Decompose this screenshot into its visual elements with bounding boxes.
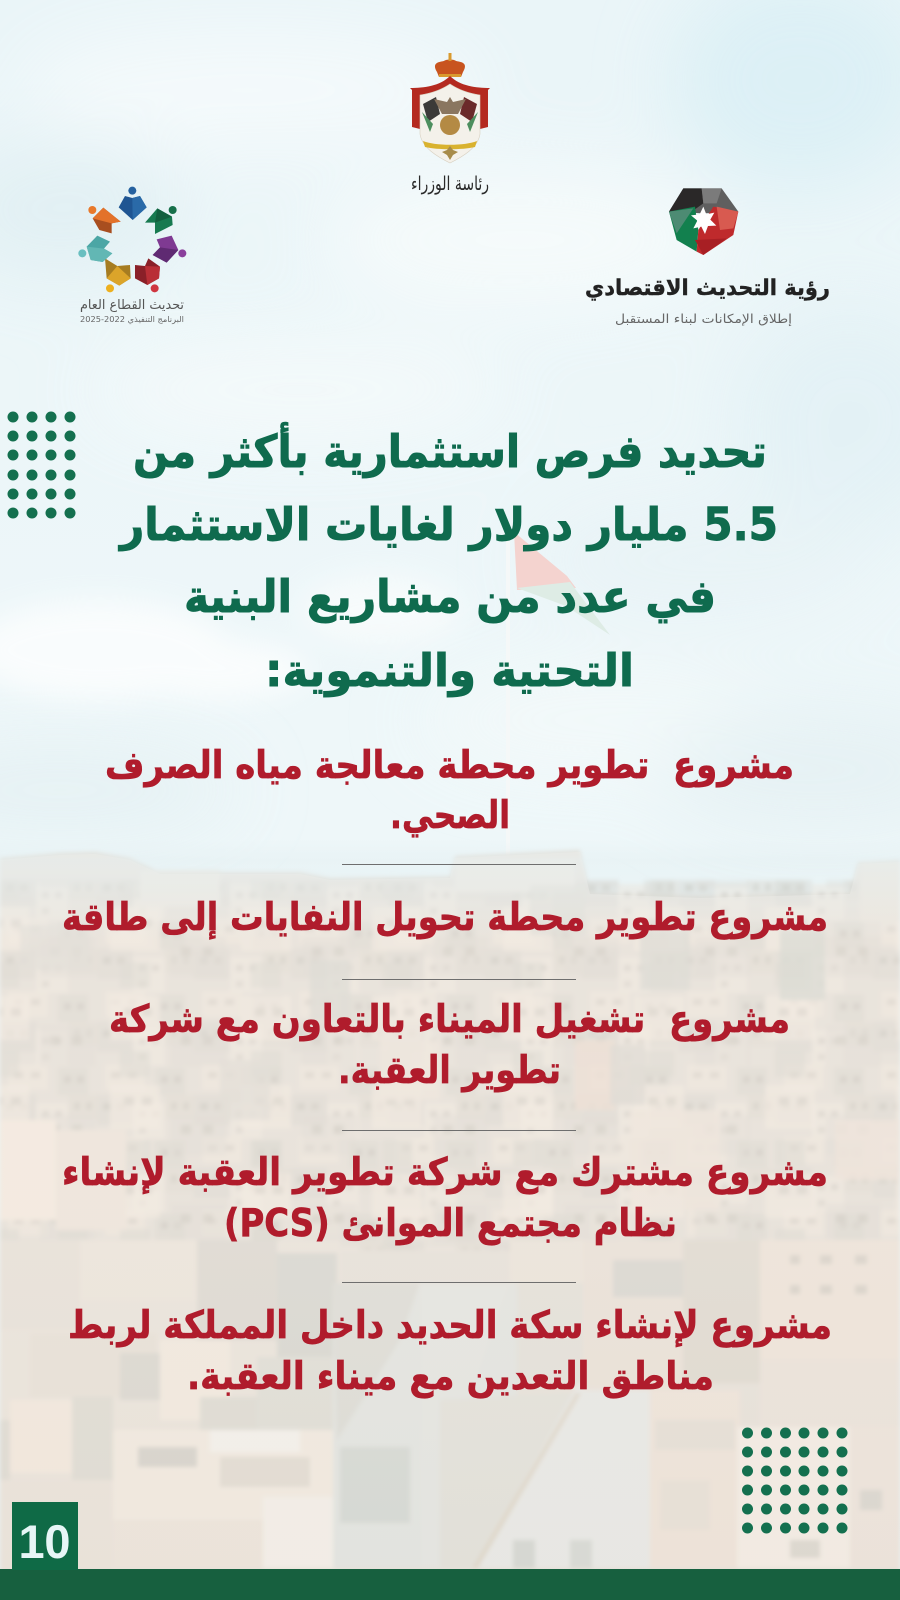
heading: تحديد فرص استثمارية بأكثر من — [133, 422, 767, 478]
logo: state crest of Jordan — [410, 53, 490, 195]
polygon emblem — [669, 188, 738, 255]
eagle — [434, 97, 466, 114]
logo: economic modernisation vision — [585, 188, 830, 327]
star medal — [442, 146, 458, 160]
logo sub caption: البرنامج التنفيذي 2022-2025 — [80, 315, 184, 324]
heading: 5.5 مليار دولار لغايات الاستثمار — [118, 498, 778, 551]
lower left buildings — [0, 1240, 340, 1570]
project 3: port operation: مشروع تشغيل الميناء بالتعاون مع شركة — [109, 997, 790, 1042]
flag pole — [506, 532, 510, 862]
calligraphy: رئاسة الوزراء — [411, 173, 489, 195]
red figure — [135, 258, 160, 292]
ribbon — [423, 141, 477, 149]
flags — [423, 97, 440, 122]
logo caption: تحديث القطاع العام — [80, 298, 184, 313]
lower right buildings — [510, 1240, 583, 1283]
project 5: railway — [68, 1303, 832, 1398]
green figure — [145, 206, 177, 234]
page number box: 10 — [18, 1515, 70, 1568]
shield — [420, 84, 480, 163]
decoration: top left dot grid — [8, 412, 76, 518]
vision name: رؤية التحديث الاقتصادي — [585, 276, 830, 301]
logo: public sector modernisation — [78, 187, 186, 324]
upper and middle hill texture — [0, 880, 900, 1250]
vision slogan: إطلاق الإمكانات لبناء المستقبل — [615, 311, 792, 327]
blue figure — [119, 187, 147, 220]
project 1: sewage treatment: الصحي. — [390, 793, 510, 837]
project 1: sewage treatment: مشروع تطوير محطة معالجة مياه الصرف — [105, 743, 794, 788]
road — [333, 1283, 517, 1568]
teal figure — [78, 236, 112, 262]
project 4: port community system: مشروع مشترك مع شركة تطوير العقبة لإنشاء — [62, 1150, 828, 1195]
footer band — [0, 1569, 900, 1600]
decoration: bottom right dot grid — [742, 1428, 848, 1534]
heading — [118, 422, 778, 697]
project 5: railway: مشروع لإنشاء سكة الحديد داخل المملكة لربط — [68, 1303, 832, 1348]
project 4: port community system — [62, 1150, 828, 1246]
project 5: railway: مناطق التعدين مع ميناء العقبة. — [187, 1354, 714, 1398]
crown — [435, 53, 465, 77]
project 3: port operation: تطوير العقبة. — [338, 1048, 561, 1092]
orange figure — [88, 206, 121, 233]
yellow figure — [105, 258, 131, 292]
project 4: port community system: نظام مجتمع الموانئ (PCS) — [224, 1201, 677, 1246]
flag — [514, 532, 610, 635]
city — [0, 850, 900, 1600]
heading: التحتية والتنموية: — [265, 644, 634, 697]
mantle — [410, 76, 490, 129]
project 1: sewage treatment — [105, 743, 794, 837]
heading: في عدد من مشاريع البنية — [184, 570, 716, 623]
purple figure — [153, 236, 186, 263]
project 3: port operation — [109, 997, 790, 1092]
globe — [440, 115, 460, 135]
page number box — [12, 1502, 78, 1570]
